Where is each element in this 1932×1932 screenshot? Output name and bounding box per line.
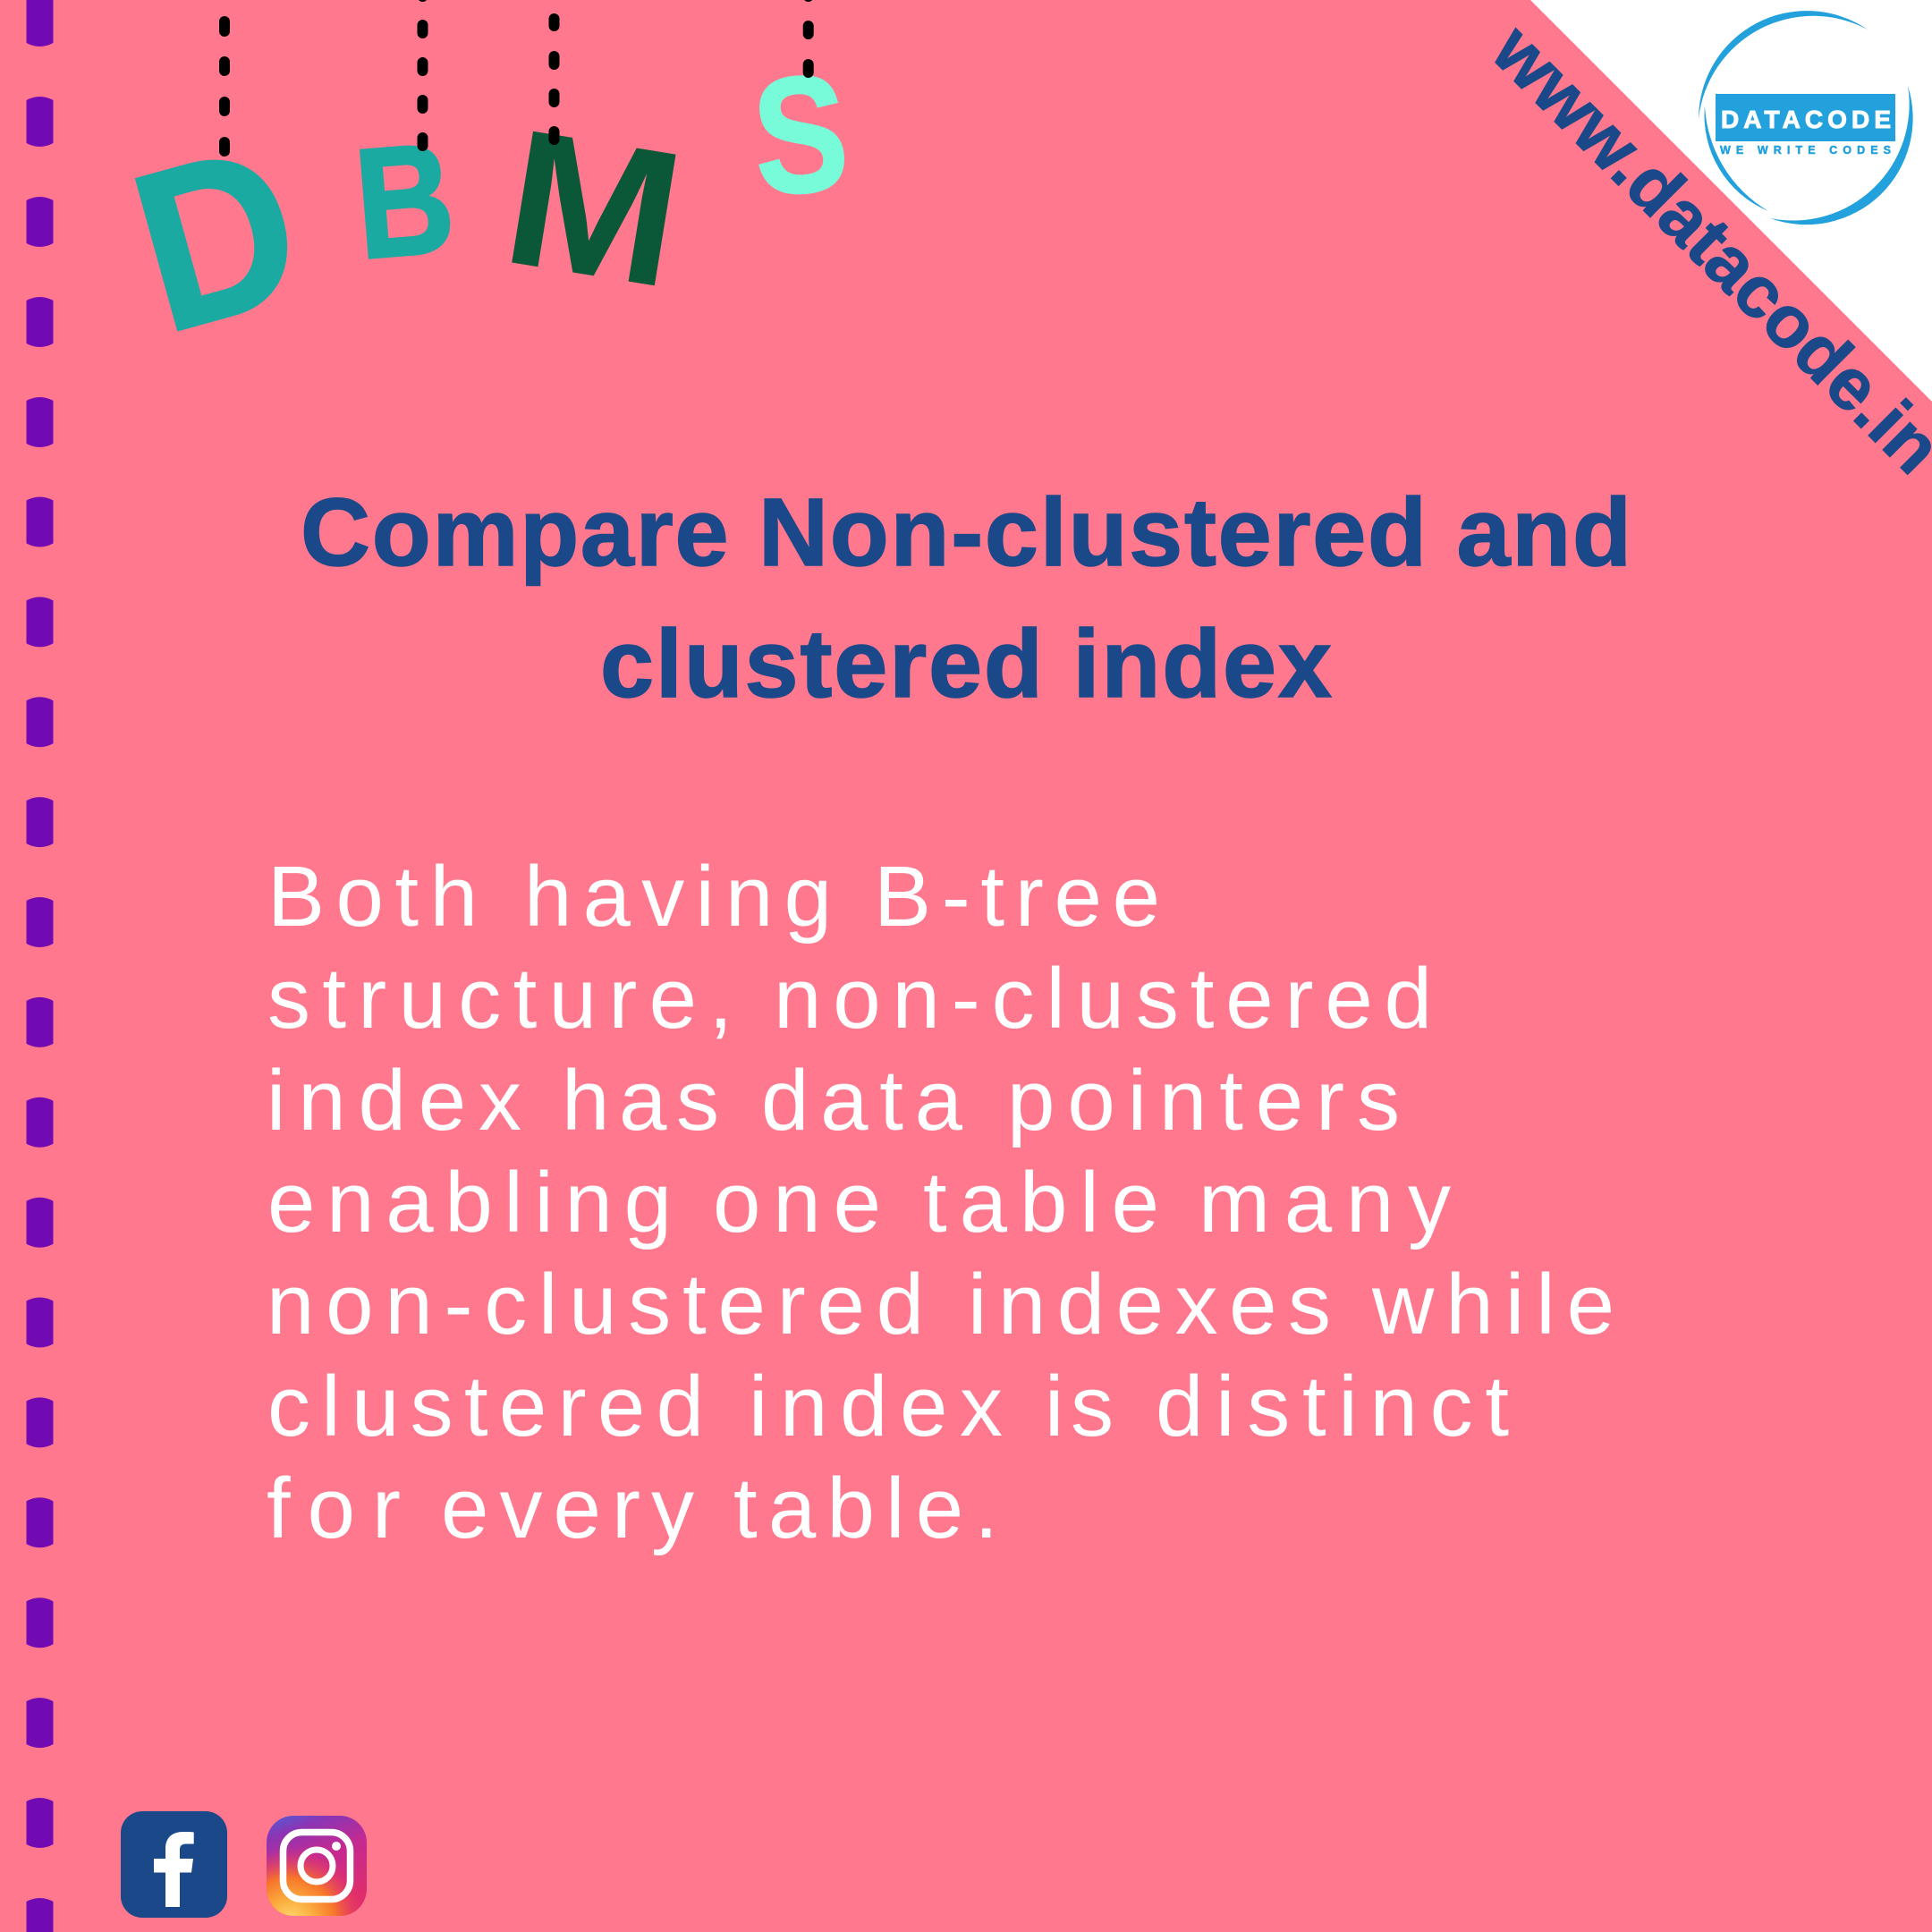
body text: is [1045, 1359, 1114, 1454]
purple dashed strip along left edge [27, 0, 54, 1932]
body text: indexes [968, 1257, 1331, 1352]
body text: having [524, 849, 832, 945]
body text: Both [267, 849, 478, 945]
logo wordmark: DATACODE [1721, 106, 1891, 133]
body text: structure, [267, 951, 733, 1046]
body text: index [749, 1359, 1003, 1454]
icon: facebook [121, 1811, 227, 1918]
body text: many [1199, 1155, 1451, 1250]
icon: instagram [267, 1816, 367, 1916]
body text: while [1371, 1257, 1614, 1352]
logo: datacode [1699, 11, 1913, 225]
body text: non-clustered [774, 951, 1432, 1046]
title: Compare Non-clustered and [301, 478, 1631, 586]
letter D: D [110, 95, 325, 380]
body text: has [562, 1053, 719, 1148]
body text: distinct [1156, 1359, 1509, 1454]
body text: clustered [267, 1359, 704, 1454]
title [301, 478, 1631, 717]
logo tagline: WE WRITE CODES [1720, 144, 1891, 157]
letter M: M [492, 89, 696, 329]
hanging DBMS letters [110, 40, 853, 380]
body text: for [267, 1461, 401, 1556]
logo ring [1699, 11, 1913, 225]
black dashed hanging threads [225, 0, 809, 151]
letter S: S [747, 40, 853, 231]
body text: every [441, 1461, 694, 1556]
logo banner [1716, 94, 1895, 141]
body text: B-tree [874, 849, 1160, 945]
body text: one [713, 1155, 881, 1250]
body text: non-clustered [267, 1257, 924, 1352]
body text [267, 849, 1614, 1556]
body text: enabling [267, 1155, 672, 1250]
body text: table [923, 1155, 1159, 1250]
body text: pointers [1007, 1053, 1400, 1148]
body text: data [761, 1053, 963, 1148]
body text: table. [733, 1461, 998, 1556]
body text: index [267, 1053, 521, 1148]
letter B: B [349, 109, 460, 292]
white corner triangle [1530, 0, 1932, 402]
title: clustered index [600, 609, 1332, 717]
